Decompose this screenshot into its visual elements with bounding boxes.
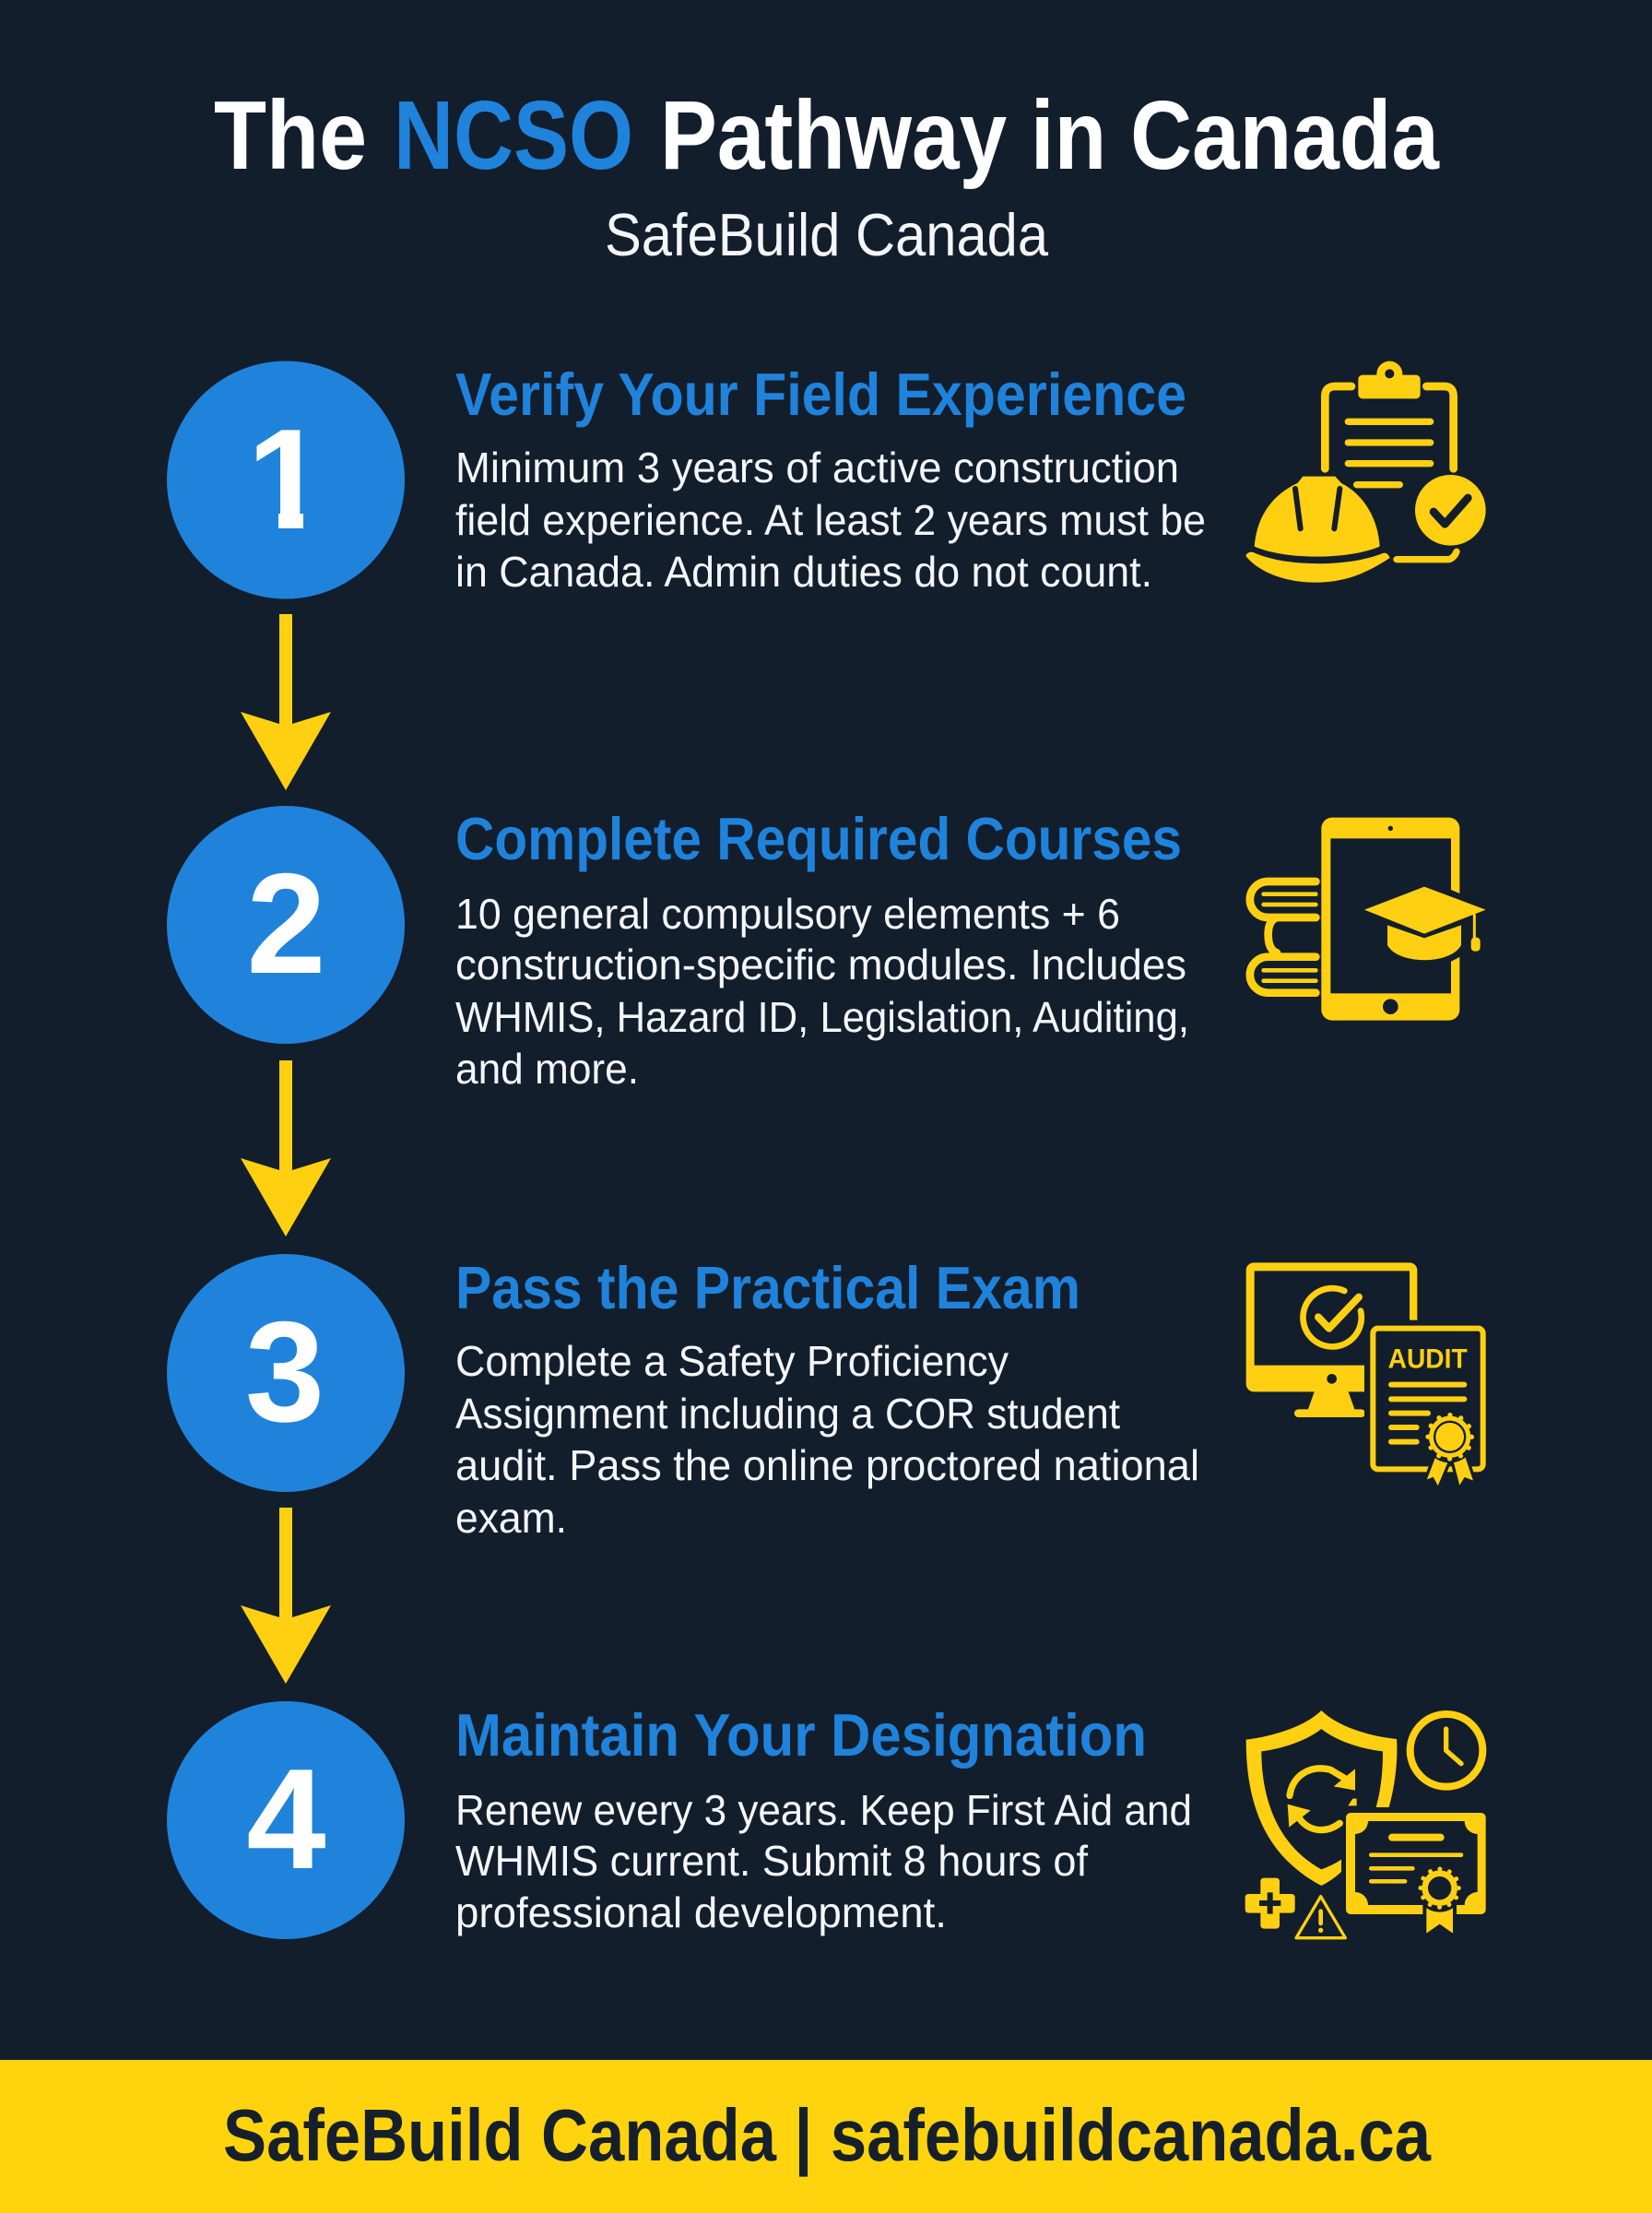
title: Pathway in Canada bbox=[660, 81, 1440, 190]
footer text: SafeBuild Canada | safebuildcanada.ca bbox=[223, 2094, 1431, 2177]
step 1 text bbox=[455, 444, 1206, 596]
icon: tablet, books and graduation cap bbox=[1250, 818, 1486, 1021]
step 1 text: in Canada. Admin duties do not count. bbox=[455, 548, 1152, 596]
step 2 text bbox=[455, 890, 1189, 1093]
step 1 text: field experience. At least 2 years must be bbox=[455, 496, 1206, 544]
step 1 heading: Verify Your Field Experience bbox=[455, 361, 1186, 428]
step 3 text bbox=[455, 1337, 1199, 1542]
step 3 text: Assignment including a COR student bbox=[455, 1390, 1120, 1438]
step 4 text: WHMIS current. Submit 8 hours of bbox=[455, 1837, 1088, 1885]
icon: monitor and audit certificate bbox=[1246, 1262, 1493, 1489]
step 4 text bbox=[455, 1786, 1192, 1936]
subtitle: SafeBuild Canada bbox=[605, 201, 1049, 268]
step 3 number circle bbox=[167, 1254, 405, 1492]
icon: shield, clock, certificate and safety symbols bbox=[1245, 1710, 1486, 1938]
step 3 text: Complete a Safety Proficiency bbox=[455, 1337, 1009, 1385]
step 1 number circle: 1 bbox=[247, 399, 326, 559]
step 2 number circle: 2 bbox=[246, 844, 326, 1003]
step 3 number circle: 3 bbox=[245, 1292, 324, 1451]
step 4 number circle bbox=[167, 1701, 405, 1939]
title bbox=[214, 81, 1440, 190]
step 4 heading: Maintain Your Designation bbox=[455, 1701, 1147, 1769]
arrow: step 3 to 4 bbox=[241, 1508, 331, 1684]
step 3 heading: Pass the Practical Exam bbox=[455, 1254, 1080, 1321]
step 3 text: exam. bbox=[455, 1494, 567, 1542]
step 1 number circle bbox=[167, 361, 405, 599]
icon: monitor and audit certificate: AUDIT bbox=[1388, 1343, 1468, 1374]
step 2 text: 10 general compulsory elements + 6 bbox=[455, 890, 1120, 938]
step 4 text: professional development. bbox=[455, 1888, 947, 1936]
step 1 text: Minimum 3 years of active construction bbox=[455, 444, 1179, 491]
step 2 text: and more. bbox=[455, 1045, 639, 1093]
step 2 number circle bbox=[167, 806, 405, 1044]
step 4 text: Renew every 3 years. Keep First Aid and bbox=[455, 1786, 1192, 1834]
footer band bbox=[0, 2060, 1652, 2213]
step 2 heading: Complete Required Courses bbox=[455, 805, 1182, 872]
title: The bbox=[214, 81, 367, 190]
step 3 text: audit. Pass the online proctored national bbox=[455, 1441, 1199, 1489]
arrow: step 2 to 3 bbox=[241, 1060, 331, 1237]
step 2 text: WHMIS, Hazard ID, Legislation, Auditing, bbox=[455, 993, 1189, 1041]
step 2 text: construction-specific modules. Includes bbox=[455, 941, 1186, 988]
title: NCSO bbox=[394, 81, 633, 190]
step 4 number circle: 4 bbox=[246, 1739, 326, 1899]
icon: hard hat and clipboard bbox=[1246, 361, 1486, 583]
arrow: step 1 to 2 bbox=[241, 614, 331, 790]
